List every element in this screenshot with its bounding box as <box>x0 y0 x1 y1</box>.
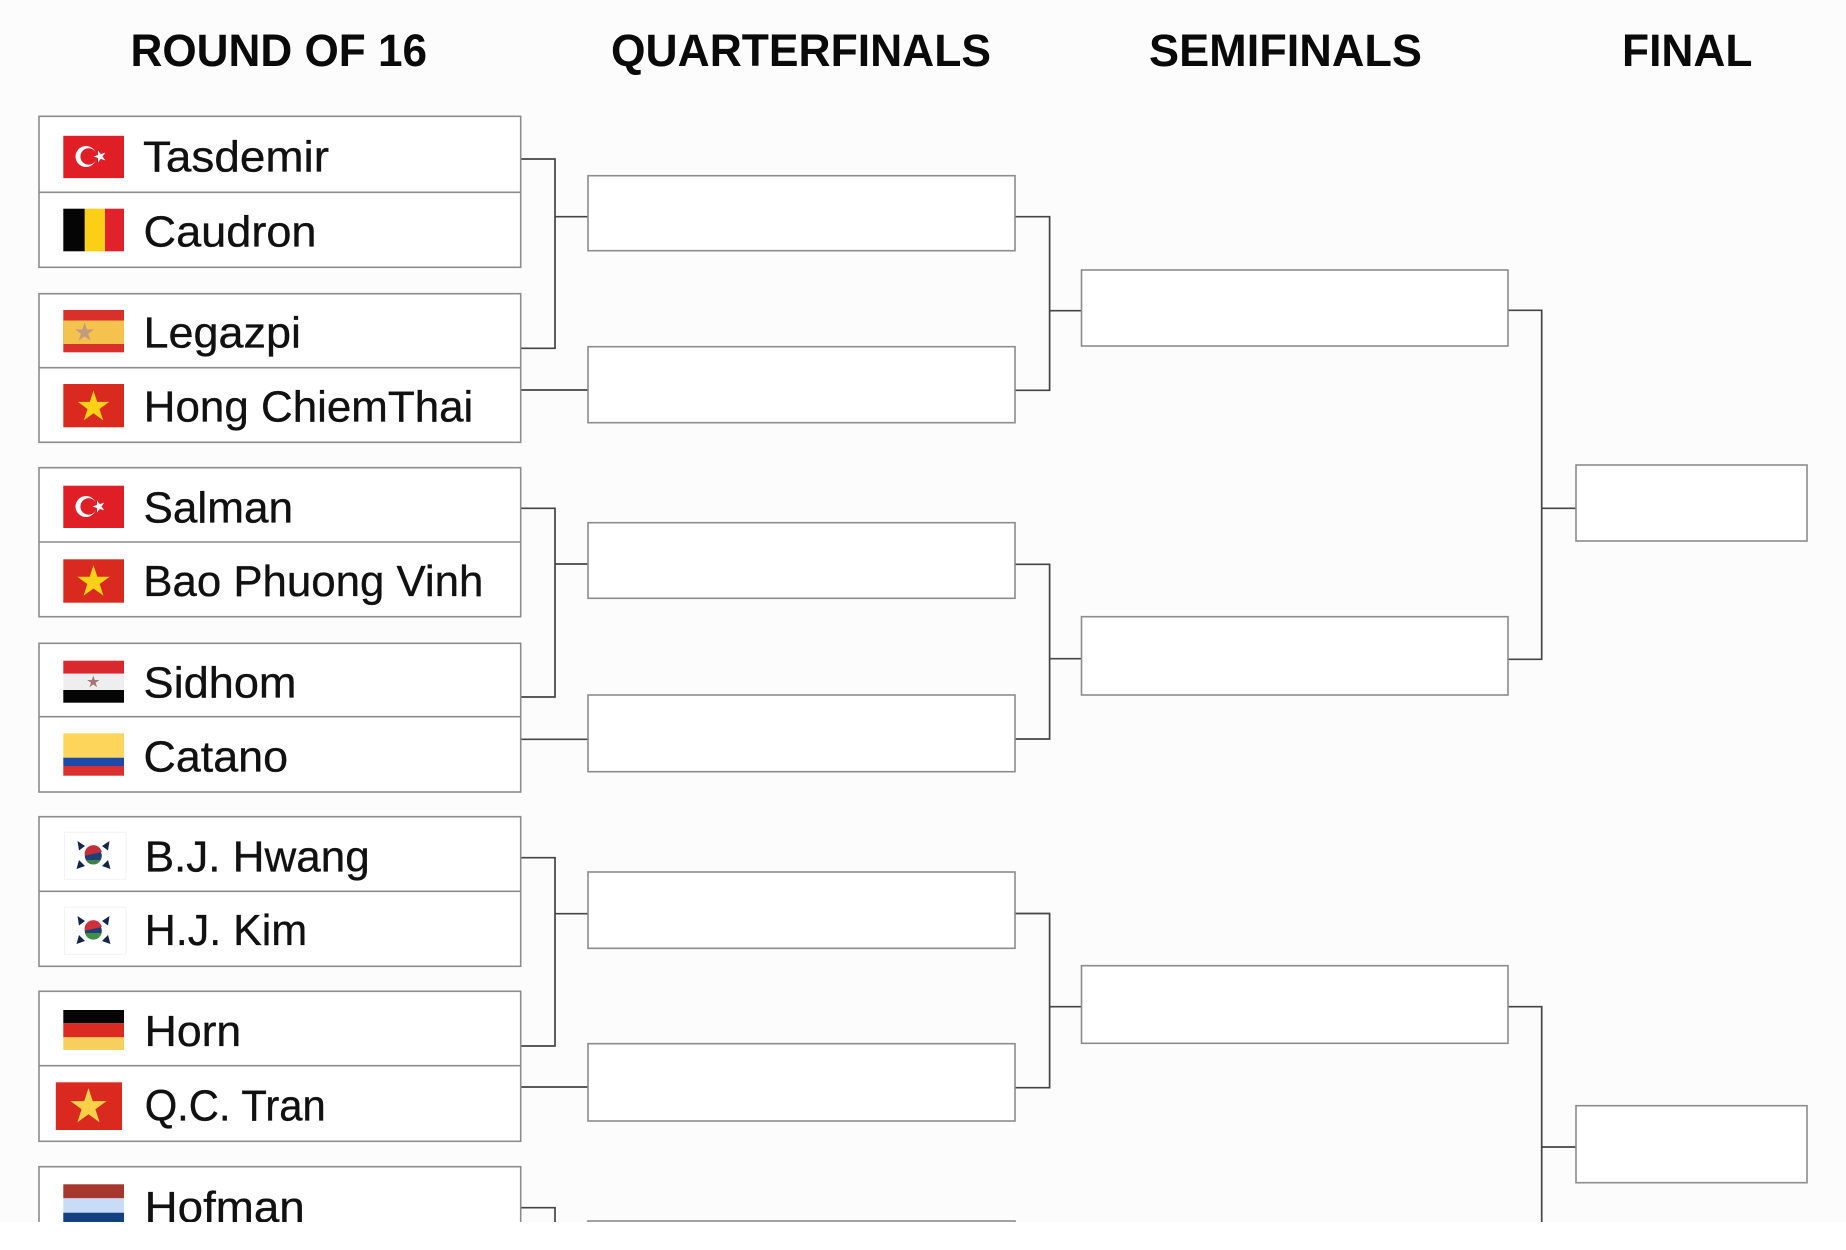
player name: B.J. Hwang <box>145 833 370 882</box>
match: Sidhom vs Catano <box>39 643 521 792</box>
icon: Vietnam flag <box>63 559 124 603</box>
match: Salman vs Bao Phuong Vinh <box>39 468 521 617</box>
player name: Hong ChiemThai <box>144 383 473 432</box>
final slots <box>1576 465 1807 1183</box>
icon: Vietnam flag <box>56 1082 122 1130</box>
icon: Netherlands flag <box>63 1184 124 1223</box>
player name: Catano <box>144 732 288 781</box>
player name: Bao Phuong Vinh <box>143 557 483 606</box>
player name: Hofman <box>145 1183 305 1232</box>
player name: Q.C. Tran <box>145 1082 326 1131</box>
player name: Caudron <box>144 208 316 257</box>
connectors: round of 16 to quarterfinals <box>521 159 588 1222</box>
player name: Horn <box>145 1007 241 1056</box>
match: Horn vs Q.C. Tran <box>39 991 521 1141</box>
icon: Turkey flag <box>63 486 124 528</box>
player name: H.J. Kim <box>145 906 307 955</box>
heading: final: FINAL <box>1622 25 1752 76</box>
player name: Tasdemir <box>143 133 329 182</box>
match: Tasdemir vs Caudron <box>39 116 521 267</box>
icon: Egypt flag <box>63 661 124 703</box>
player name: Sidhom <box>144 658 296 707</box>
player name: Salman <box>144 484 293 533</box>
icon: Turkey flag <box>63 136 124 178</box>
icon: South Korea flag <box>64 832 126 879</box>
semifinal slots <box>1082 270 1508 1043</box>
icon: Vietnam flag <box>63 384 124 427</box>
icon: South Korea flag <box>64 907 126 954</box>
match: Legazpi vs Hong Chiem Thai <box>39 294 521 442</box>
icon: Belgium flag <box>63 209 124 251</box>
heading: round of 16: ROUND OF 16 <box>130 25 427 76</box>
connectors: semifinals to final <box>1508 310 1576 1222</box>
match: Hofman (cut off) <box>39 1167 521 1237</box>
player name: Legazpi <box>144 309 301 358</box>
icon: Colombia flag <box>63 733 124 776</box>
quarterfinal slots <box>588 176 1015 1250</box>
connectors: quarterfinals to semifinals <box>1015 217 1082 1088</box>
match: B.J. Hwang vs H.J. Kim <box>39 817 521 966</box>
heading: semifinals: SEMIFINALS <box>1149 25 1422 76</box>
heading: quarterfinals: QUARTERFINALS <box>611 25 991 76</box>
icon: Spain flag <box>63 310 124 352</box>
icon: Germany flag <box>63 1010 124 1050</box>
